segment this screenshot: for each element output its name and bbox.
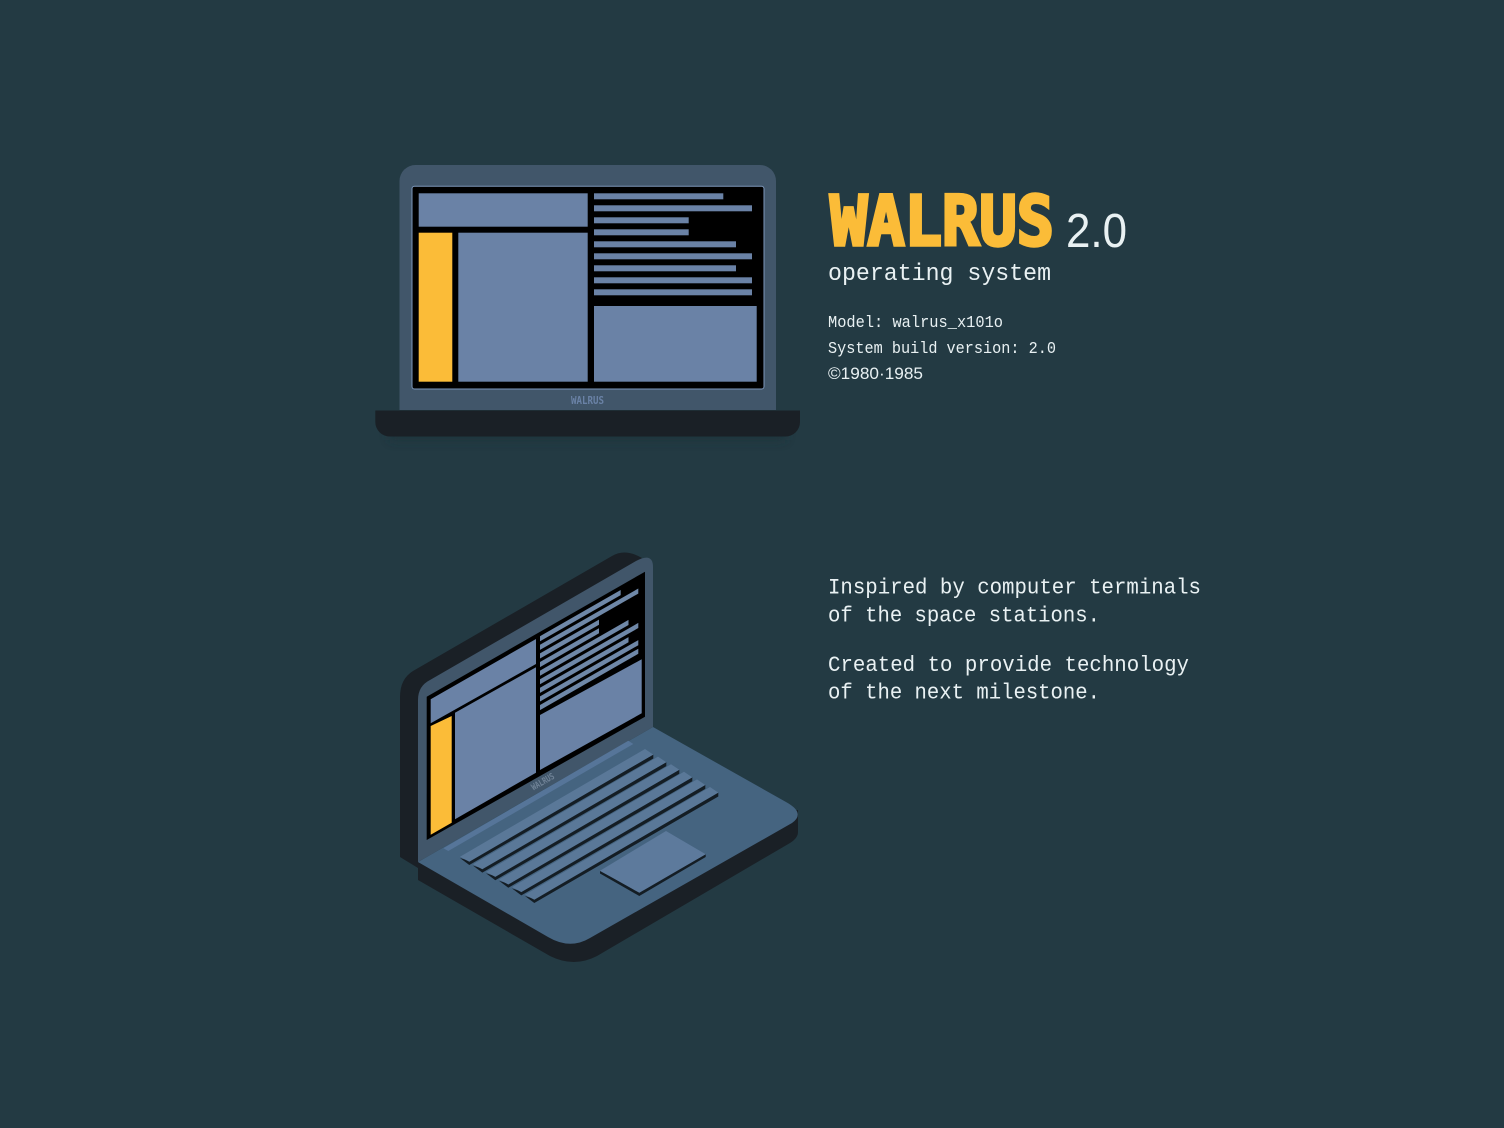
- screen lower right panel: [594, 306, 757, 382]
- isometric view laptop: [400, 552, 798, 962]
- laptop lid: [400, 165, 776, 410]
- lid back edge: [400, 552, 642, 868]
- front view laptop: [375, 165, 800, 440]
- screen text lines: [540, 588, 638, 710]
- first paragraph: [828, 576, 1201, 628]
- laptop shadow: [390, 426, 785, 440]
- build version line: System build version: 2.0: [828, 340, 1056, 359]
- second paragraph: of the next milestone.: [828, 680, 1100, 706]
- description text: [828, 576, 1201, 706]
- screen top panel: [419, 193, 588, 227]
- speaker strip: [443, 741, 633, 851]
- trackpad: [600, 831, 706, 896]
- screen text lines: [594, 193, 752, 295]
- screen lower right panel: [540, 659, 642, 770]
- base underside: [418, 810, 798, 962]
- first paragraph: of the space stations.: [828, 604, 1100, 628]
- copyright line: ©1980·1985: [828, 364, 923, 383]
- screen top panel: [431, 639, 536, 723]
- screen: [427, 572, 645, 840]
- lid logo: WALRUS: [571, 394, 604, 407]
- screen main panel: [458, 233, 588, 382]
- lid front: [418, 558, 653, 862]
- second paragraph: Created to provide technology: [828, 653, 1189, 678]
- model line: Model: walrus_x101o: [828, 314, 1003, 333]
- laptop base: [375, 410, 800, 436]
- subtitle: operating system: [828, 261, 1051, 288]
- lid logo: WALRUS: [530, 772, 557, 793]
- first paragraph: Inspired by computer terminals: [828, 576, 1201, 600]
- yellow sidebar: [419, 233, 452, 382]
- WALRUS wordmark: WALRUS: [830, 182, 1054, 262]
- base top surface: [418, 727, 798, 944]
- screen main panel: [455, 667, 536, 819]
- title block: [828, 182, 1127, 383]
- yellow sidebar: [431, 716, 452, 835]
- screen: [412, 186, 764, 389]
- version number: 2.0: [1066, 205, 1127, 258]
- keyboard key rows: [460, 749, 718, 903]
- second paragraph: [828, 653, 1189, 706]
